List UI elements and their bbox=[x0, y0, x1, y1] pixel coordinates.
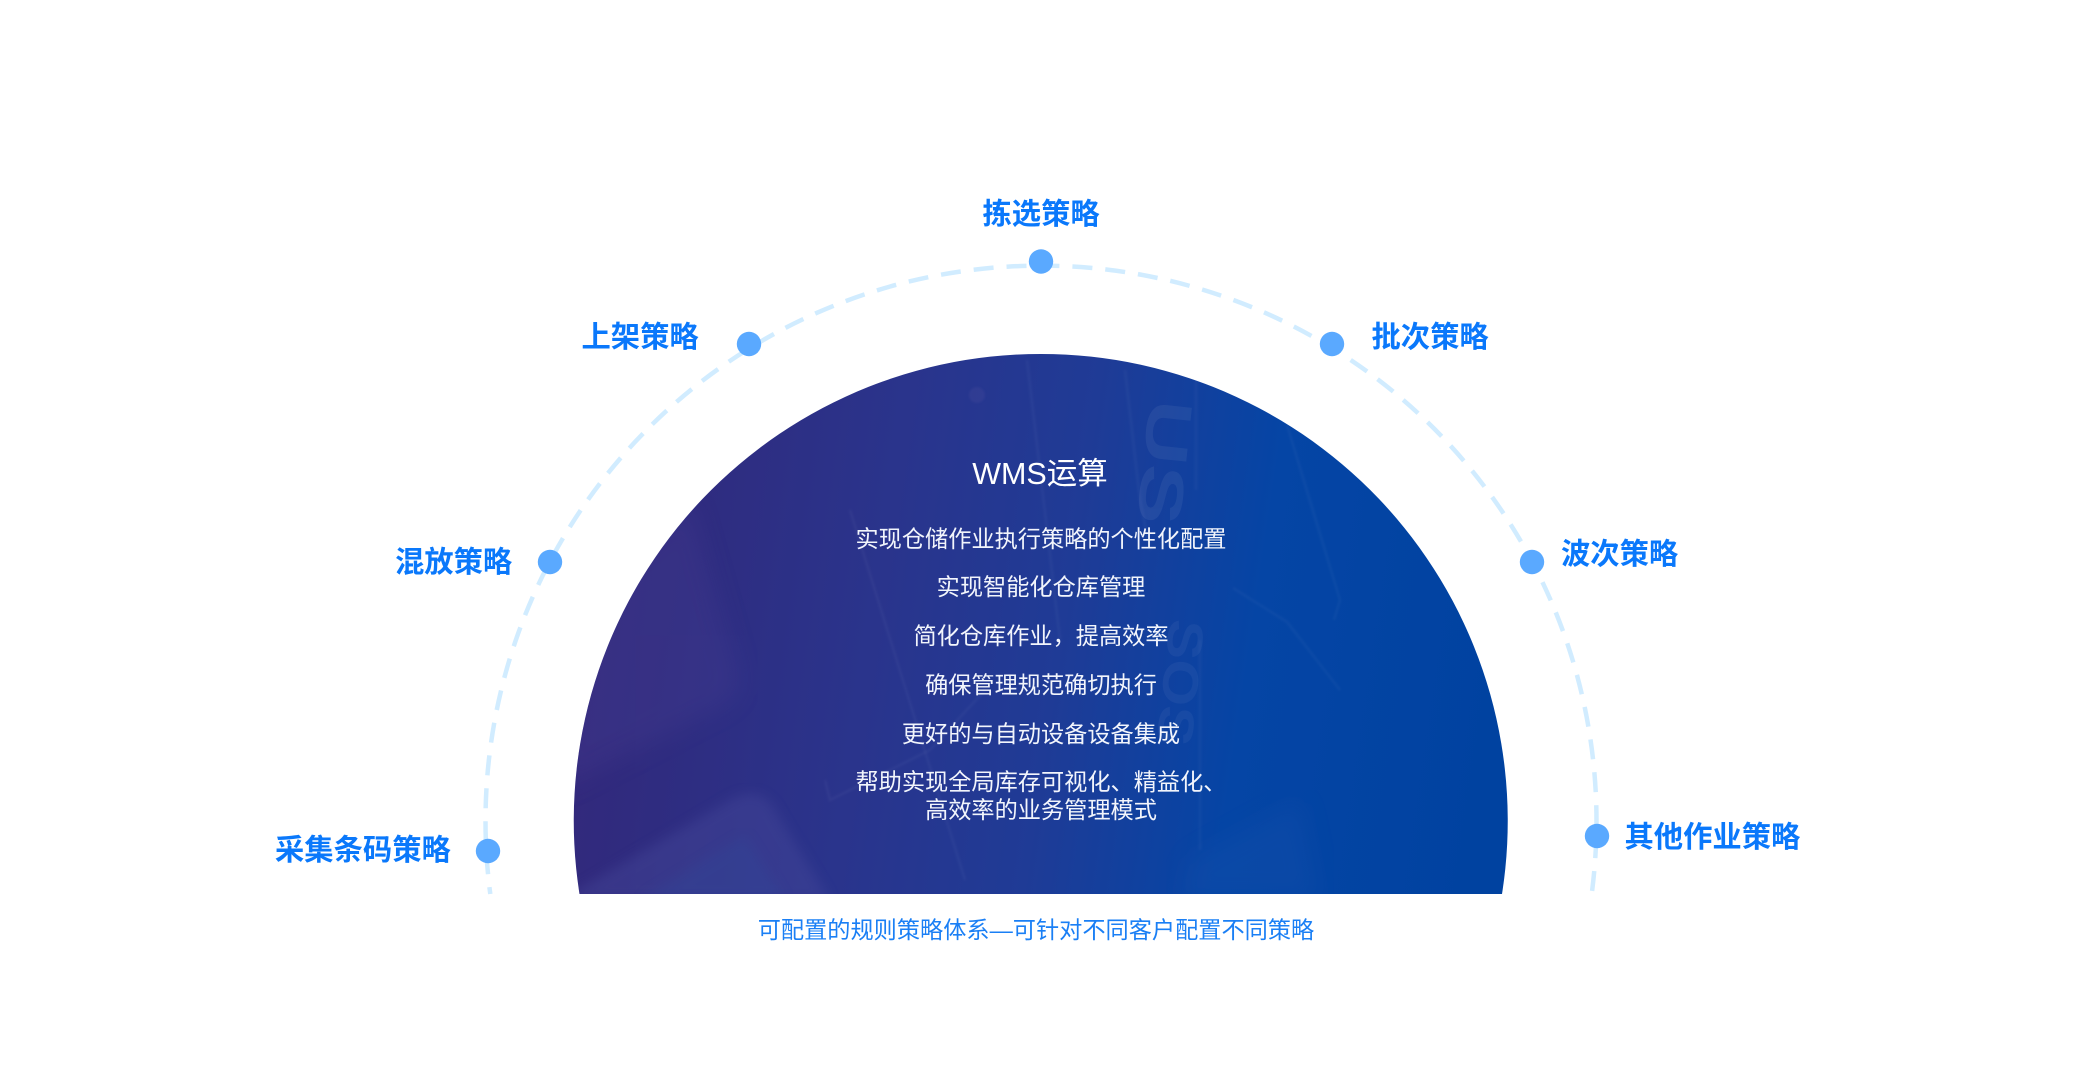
faint background lettering: US bbox=[1123, 397, 1205, 528]
panel text lines: 简化仓库作业，提高效率 bbox=[913, 623, 1169, 649]
node: 波次策略: 波次策略 bbox=[1561, 538, 1679, 571]
node: 混放策略: 混放策略 bbox=[395, 546, 513, 579]
node: 上架策略 bbox=[582, 321, 761, 356]
semicircle panel: WMS bbox=[560, 350, 1515, 900]
panel text lines: 实现智能化仓库管理 bbox=[937, 574, 1145, 600]
faint background lettering: SOS bbox=[1146, 617, 1215, 749]
node: 其他作业策略: 其他作业策略 bbox=[1624, 821, 1801, 854]
panel text lines: 确保管理规范确切执行 bbox=[925, 672, 1157, 698]
node: 批次策略: 批次策略 bbox=[1372, 321, 1489, 354]
node: 采集条码策略: 采集条码策略 bbox=[275, 834, 451, 867]
dashed orbit arc bbox=[485, 266, 1596, 894]
node: 批次策略 bbox=[1320, 321, 1489, 356]
panel text lines: 更好的与自动设备设备集成 bbox=[902, 721, 1180, 747]
panel text lines: 高效率的业务管理模式 bbox=[925, 797, 1157, 823]
panel text lines: 帮助实现全局库存可视化、精益化、 bbox=[856, 769, 1226, 795]
caption: 可配置的规则策略体系—可针对不同客户配置不同策略 bbox=[758, 917, 1314, 943]
node: 波次策略 bbox=[1520, 538, 1679, 574]
node: 上架策略: 上架策略 bbox=[582, 321, 699, 354]
panel title: WMS运算 bbox=[972, 457, 1108, 491]
faint background lettering bbox=[1139, 405, 1202, 743]
background texture: chips and circuit traces bbox=[560, 360, 1340, 900]
panel text lines: 实现仓储作业执行策略的个性化配置 bbox=[856, 526, 1226, 552]
node: 拣选策略 bbox=[982, 198, 1100, 274]
node: 拣选策略: 拣选策略 bbox=[982, 198, 1100, 231]
strategy diagram bbox=[276, 198, 1800, 940]
panel text lines bbox=[856, 526, 1226, 823]
